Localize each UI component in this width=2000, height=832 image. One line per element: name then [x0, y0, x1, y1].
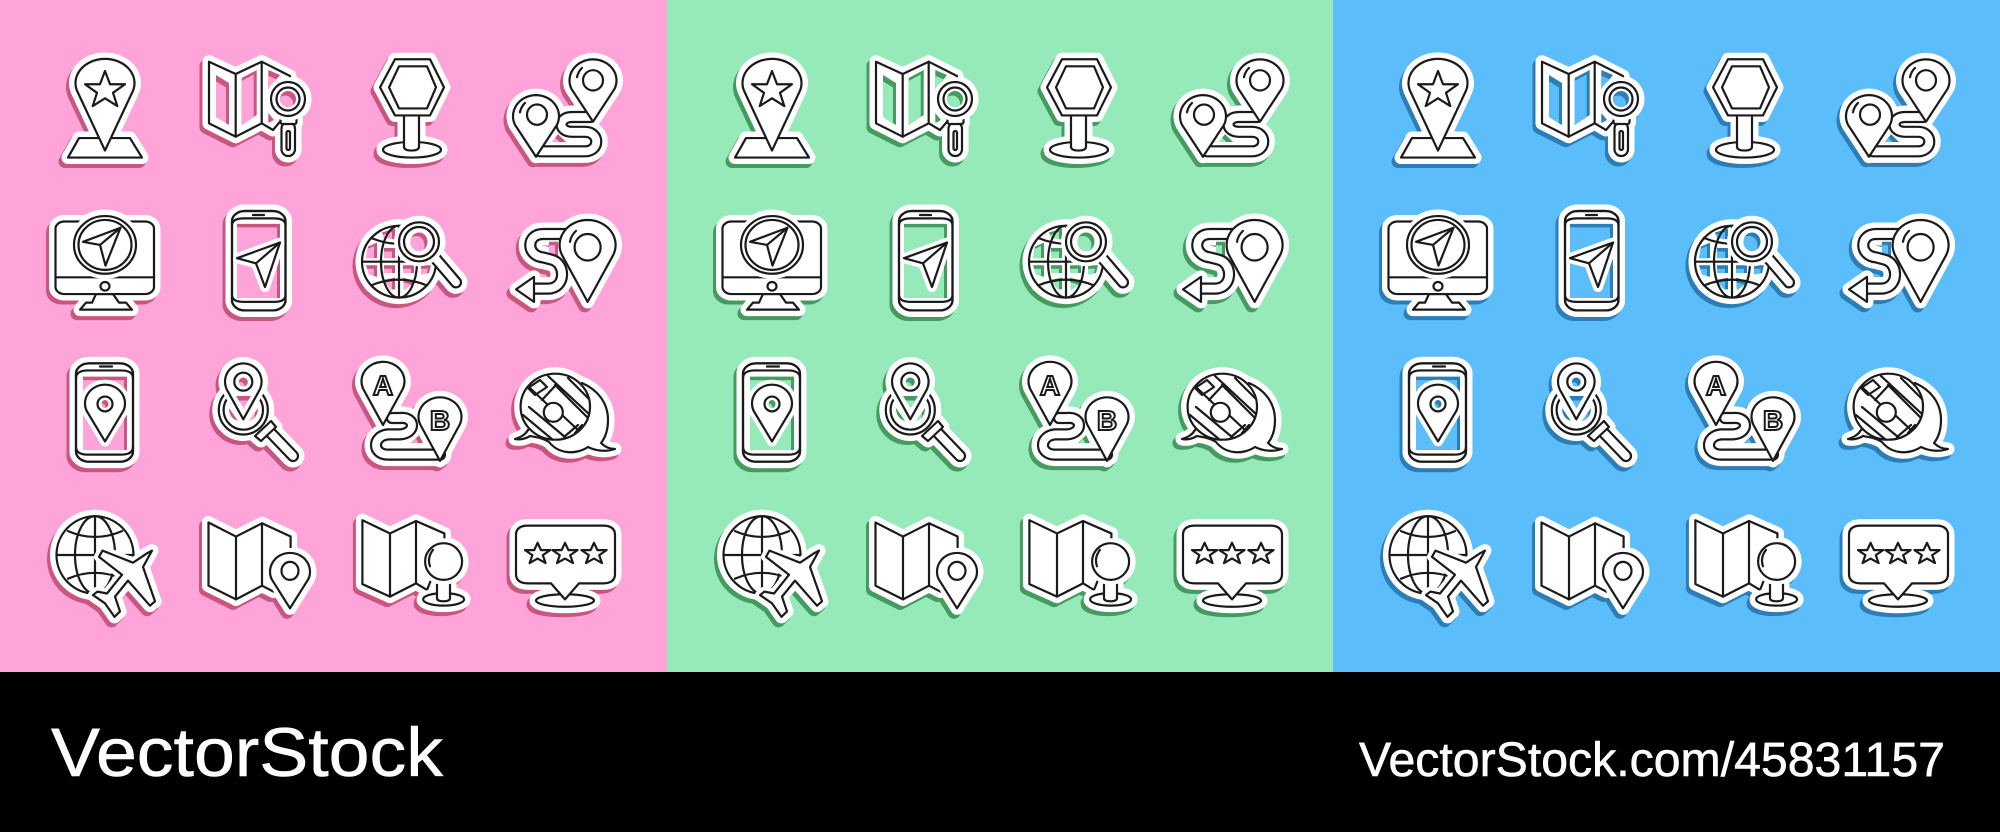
- icon: star location pin on map: [732, 59, 809, 162]
- icon: hexagon push pin: [1044, 59, 1111, 162]
- icon: two pins with route: [1177, 59, 1284, 161]
- icon: route from A to B: [1026, 362, 1128, 465]
- panel: pink icon set: [0, 0, 667, 672]
- icon: two pins with route: [1843, 59, 1950, 161]
- icon: route from A to B: A: [1706, 370, 1726, 401]
- icon: map with location pin: [206, 523, 310, 612]
- icon: route arrow with pin: [1180, 220, 1283, 306]
- image URL: VectorStock.com/45831157: [1359, 734, 1945, 787]
- icon: map with location pin: [872, 523, 977, 612]
- icon: route from A to B: B: [430, 405, 450, 436]
- icon: phone with location pin: [1406, 363, 1466, 466]
- icon: speech bubble with city map: [1179, 374, 1282, 456]
- icon: route arrow with pin: [513, 220, 616, 306]
- icon: globe with airplane: [720, 516, 822, 621]
- icon: folded map with magnifier: [206, 62, 305, 160]
- icon: monitor with navigation arrow: [720, 216, 821, 314]
- icon: route from A to B: A: [1040, 370, 1060, 401]
- icon: globe with magnifier: [1692, 222, 1789, 302]
- icon: map with round push pin: [1026, 520, 1131, 610]
- icon: route from A to B: [1692, 362, 1794, 465]
- panel: green icon set: [667, 0, 1333, 672]
- icon: monitor with navigation arrow: [52, 216, 154, 314]
- icon: phone with location pin: [73, 363, 133, 466]
- icon: hexagon push pin: [377, 59, 444, 162]
- brand name: VectorStock: [51, 714, 444, 791]
- icon: two pins with route: [510, 59, 616, 161]
- icon: phone with navigation arrow: [1562, 211, 1618, 314]
- icon: speech bubble with city map: [1845, 374, 1948, 456]
- icon: globe with airplane: [54, 516, 155, 621]
- icon: phone with navigation arrow: [229, 211, 286, 314]
- icon: route arrow with pin: [1846, 220, 1949, 306]
- icon: map with round push pin: [1692, 520, 1797, 610]
- icon: magnifier with location pin: [216, 363, 293, 460]
- icon: three star rating bubble: [1846, 526, 1948, 611]
- icon: map with round push pin: [359, 520, 464, 610]
- icon: phone with navigation arrow: [896, 211, 952, 314]
- icon: route from A to B: [358, 362, 462, 465]
- footer band: [0, 672, 2000, 832]
- icon: route from A to B: B: [1097, 405, 1117, 436]
- icon: route from A to B: B: [1763, 405, 1783, 436]
- icon: globe with airplane: [1386, 516, 1488, 621]
- icon: map with location pin: [1538, 523, 1643, 612]
- icon: three star rating bubble: [1180, 526, 1282, 611]
- icon: monitor with navigation arrow: [1386, 216, 1487, 314]
- icon: phone with location pin: [740, 363, 800, 466]
- panel: blue icon set: [1333, 0, 2000, 672]
- icon: star location pin on map: [65, 59, 142, 162]
- icon: folded map with magnifier: [873, 62, 972, 160]
- icon: star location pin on map: [1398, 59, 1475, 162]
- icon: route from A to B: A: [373, 370, 393, 401]
- icon: magnifier with location pin: [883, 363, 960, 460]
- icon: globe with magnifier: [359, 222, 456, 302]
- icon: folded map with magnifier: [1539, 62, 1638, 160]
- icon: hexagon push pin: [1710, 59, 1777, 162]
- icon: speech bubble with city map: [512, 374, 615, 456]
- icon: magnifier with location pin: [1549, 363, 1626, 460]
- icon: globe with magnifier: [1026, 222, 1123, 302]
- icon: three star rating bubble: [513, 526, 615, 611]
